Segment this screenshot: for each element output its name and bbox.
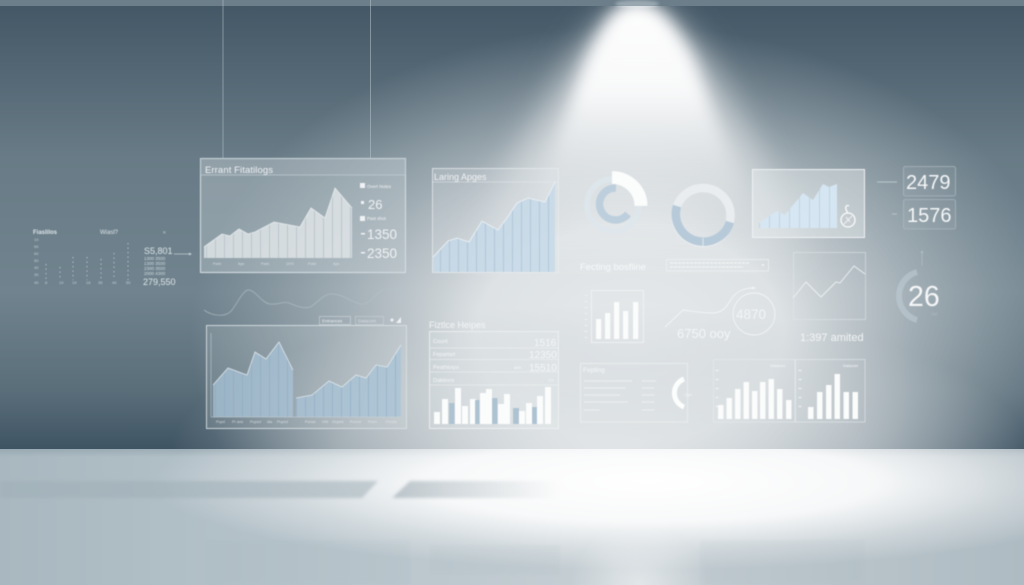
panel: fepting list: Opt <box>685 392 692 397</box>
table rows: Fepartart <box>433 352 456 358</box>
heading: Errant Fitatilogs <box>205 165 273 176</box>
panel: blue area chart bottom left: Puen <box>368 420 377 424</box>
legend and values: Overt Notes <box>367 184 392 189</box>
left data table: Fiaslilos <box>33 230 58 236</box>
panel: blue area chart bottom left: Pound <box>350 420 361 424</box>
panel: twin bar charts: Datacom <box>843 364 858 368</box>
icon: dial <box>841 205 855 227</box>
floor shadow reflection <box>0 481 560 498</box>
table rows: <> <box>548 378 554 384</box>
panel: blue area chart bottom left <box>206 326 406 428</box>
left data table: 2000 4300 <box>144 271 166 276</box>
panel: blue area chart bottom left: Pr ane <box>232 420 243 424</box>
left data table: 30 <box>34 272 39 277</box>
wave line <box>204 289 406 315</box>
left data table: 50 <box>34 258 39 263</box>
small tabs: Datacom <box>358 318 376 324</box>
left data table: ≈ <box>163 230 166 236</box>
left data table: 35 <box>98 280 103 285</box>
panel: small area chart right <box>752 170 864 238</box>
floor <box>0 449 1024 585</box>
gauge 26: 26 <box>908 281 940 313</box>
left data table: 1300 3500 <box>144 256 166 261</box>
curve with circle 4870: 4870 <box>736 307 766 322</box>
table rows: Peathkeps <box>433 365 459 371</box>
panel: blue area chart bottom left: Ofd <box>322 420 328 424</box>
table rows: 1516 <box>534 338 557 349</box>
table rows: 15510 <box>529 363 557 374</box>
ceiling band <box>0 0 1024 8</box>
floor reflection of panels <box>205 540 865 585</box>
panel: blue area chart bottom left: Ponde <box>386 420 397 424</box>
donut chart 1 <box>587 177 641 231</box>
left data table: 40 <box>34 280 39 285</box>
left data table: 40 <box>34 265 39 270</box>
panel: area chart top left <box>200 158 406 272</box>
heading: Laring Apges <box>434 172 487 182</box>
panel: blue area chart bottom left: dia <box>267 420 273 424</box>
left data table: 60 <box>34 251 39 256</box>
area chart: Point <box>308 262 316 266</box>
small tabs: Entrances <box>322 318 343 324</box>
area chart: Point <box>261 262 269 266</box>
text: 6750 ooy: 6750 ooy <box>677 326 731 341</box>
table rows <box>433 338 557 384</box>
text: amited: 1:397 amited <box>800 332 864 344</box>
panel: blue area chart bottom left: Puped <box>250 420 261 424</box>
panel: blue area chart bottom left: Ponse <box>305 420 316 424</box>
area chart: Ape <box>333 262 339 266</box>
legend and values: 1350 <box>367 227 397 242</box>
panel: blue area chart bottom left: Puped <box>277 420 288 424</box>
panel: fepting list: Fepting <box>583 367 605 374</box>
gauge 26 <box>899 250 940 320</box>
panel: twin bar charts <box>714 360 865 422</box>
legend and values <box>360 183 397 261</box>
area chart: 1970 <box>286 262 294 266</box>
legend and values: 26 <box>368 197 382 212</box>
area chart: Point <box>213 262 221 266</box>
table rows: Count <box>433 339 448 345</box>
area chart: Ape <box>238 262 244 266</box>
stat box 1576 <box>904 200 956 229</box>
legend and values: 2350 <box>367 246 397 261</box>
arrow: table to panel <box>174 252 192 256</box>
dashboard content <box>33 158 956 428</box>
bars <box>434 387 551 424</box>
stat box 2479 <box>904 166 956 196</box>
left data table: Wiasl? <box>100 230 119 236</box>
left data table: 2300 3500 <box>144 266 166 271</box>
legend and values: Past shot <box>367 216 387 221</box>
left data table: 279,550 <box>143 277 176 287</box>
stat box 1576: 1576 <box>907 205 952 227</box>
left data table: S5,801 <box>144 246 173 256</box>
panel: twin bar charts: Datacom <box>770 364 785 368</box>
donut chart 2 <box>676 188 730 248</box>
heading: fecting bosfline: Fecting bosfline <box>580 262 646 273</box>
small tabs <box>320 316 401 324</box>
left data table: 1300 3500 <box>144 261 166 266</box>
left data table: 8 <box>45 280 48 285</box>
panel: laring apges chart <box>432 168 558 272</box>
left data table <box>33 230 176 287</box>
search field <box>666 260 768 271</box>
left data table: 40 <box>112 280 117 285</box>
table rows: Daktions <box>433 378 455 384</box>
curve with circle 4870 <box>665 286 775 335</box>
spotlight cone <box>492 6 779 230</box>
hanging wires <box>223 0 370 158</box>
heading: fiztlce heipes: Fiztlce Heipes <box>429 320 486 330</box>
table rows: ann <box>514 365 522 370</box>
left data table: 10 <box>34 237 39 242</box>
panel: line chart right <box>793 252 866 320</box>
panel: blue area chart bottom left: Ouped <box>332 420 343 424</box>
area chart <box>204 188 352 266</box>
connector lines <box>877 182 897 214</box>
panel: metrics table and bars <box>430 332 558 428</box>
left data table: 50 <box>34 244 39 249</box>
left data table: 19 <box>72 280 77 285</box>
gauge 26: Opt <box>931 311 938 316</box>
left data table: 10 <box>59 280 64 285</box>
table rows: 12350 <box>529 350 557 361</box>
panel: fepting list <box>580 364 692 422</box>
wall background <box>0 0 1024 449</box>
stat box 2479: 2479 <box>906 172 950 194</box>
bar chart small <box>586 290 644 342</box>
left data table: 16 <box>86 280 91 285</box>
panel: blue area chart bottom left: Pupd <box>216 420 225 424</box>
left data table: 50 <box>126 280 131 285</box>
